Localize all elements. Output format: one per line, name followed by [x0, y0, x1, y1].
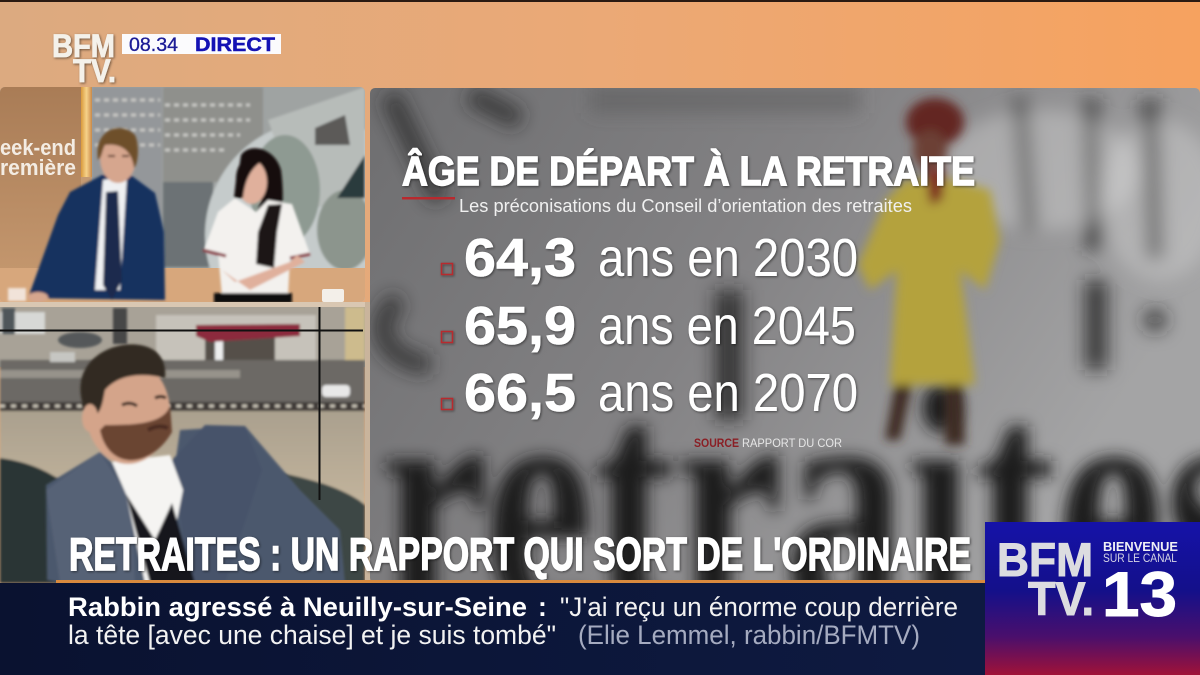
ticker band: [0, 580, 1200, 675]
row: 2045: 65,9: [464, 296, 576, 356]
source: RAPPORT DU COR: [742, 438, 842, 450]
channel promo block: [985, 522, 1200, 675]
blurred figurine: [858, 98, 1000, 445]
BFM TV logo: TV.: [73, 53, 116, 89]
wood wall with programme name: remière: [0, 155, 76, 180]
row: 2070: ans en 2070: [598, 363, 858, 423]
promo logo: [997, 533, 1094, 625]
promo message: SUR LE CANAL: [1103, 553, 1178, 565]
row: 2030: [440, 238, 858, 287]
row: 2030: 64,3: [464, 228, 576, 288]
BFM TV logo: BFM: [52, 28, 115, 64]
promo message: 13: [1102, 560, 1177, 630]
ticker text: Rabbin agressé à Neuilly-sur-Seine: [68, 592, 527, 622]
panel: guest with river backdrop: [0, 307, 365, 583]
subtitle: Les préconisations du Conseil d’orientation des retraites: [459, 196, 912, 216]
row: 2045: ans en 2045: [598, 296, 856, 356]
row: 2070: [440, 373, 858, 422]
ticker text: "J'ai reçu un énorme coup derrière: [560, 592, 958, 622]
time and live tag: [122, 34, 281, 56]
row: 2045: [440, 306, 856, 355]
blurred newspaper background: [383, 95, 1200, 420]
red accent line: [402, 197, 455, 200]
BFM TV logo: [52, 28, 116, 89]
ticker text: :: [538, 592, 547, 622]
promo logo: TV.: [1028, 572, 1094, 625]
window frame lines: [0, 307, 363, 500]
mug on desk: [322, 289, 344, 302]
time and live tag: DIRECT: [195, 34, 275, 56]
source: SOURCE: [694, 438, 739, 450]
promo logo: BFM: [997, 533, 1093, 586]
row: 2030: ans en 2030: [598, 228, 858, 288]
panel: studio presenters: [0, 87, 365, 302]
heading: ÂGE DE DÉPART À LA RETRAITE: [402, 148, 975, 194]
promo message: BIENVENUE: [1103, 540, 1178, 554]
wood wall with programme name: eek-end: [0, 135, 76, 160]
guest in blue-grey jacket: [46, 344, 345, 583]
ticker text: (Elie Lemmel, rabbin/BFMTV): [578, 620, 920, 650]
presenter in navy suit: [8, 128, 165, 302]
time and live tag: 08.34: [129, 34, 178, 56]
ticker text: la tête [avec une chaise] et je suis tombé": [68, 620, 556, 650]
panel: retirement figures on blurred photo: [370, 88, 1200, 580]
wood wall with programme name: [0, 87, 92, 269]
studio desk: [0, 268, 365, 303]
building backdrop: [92, 87, 365, 302]
ticker text: [68, 592, 958, 650]
backdrop buildings and road: [0, 307, 365, 583]
source: [694, 438, 842, 447]
presenter in white polo: [203, 148, 310, 303]
row: 2070: 66,5: [464, 363, 576, 423]
